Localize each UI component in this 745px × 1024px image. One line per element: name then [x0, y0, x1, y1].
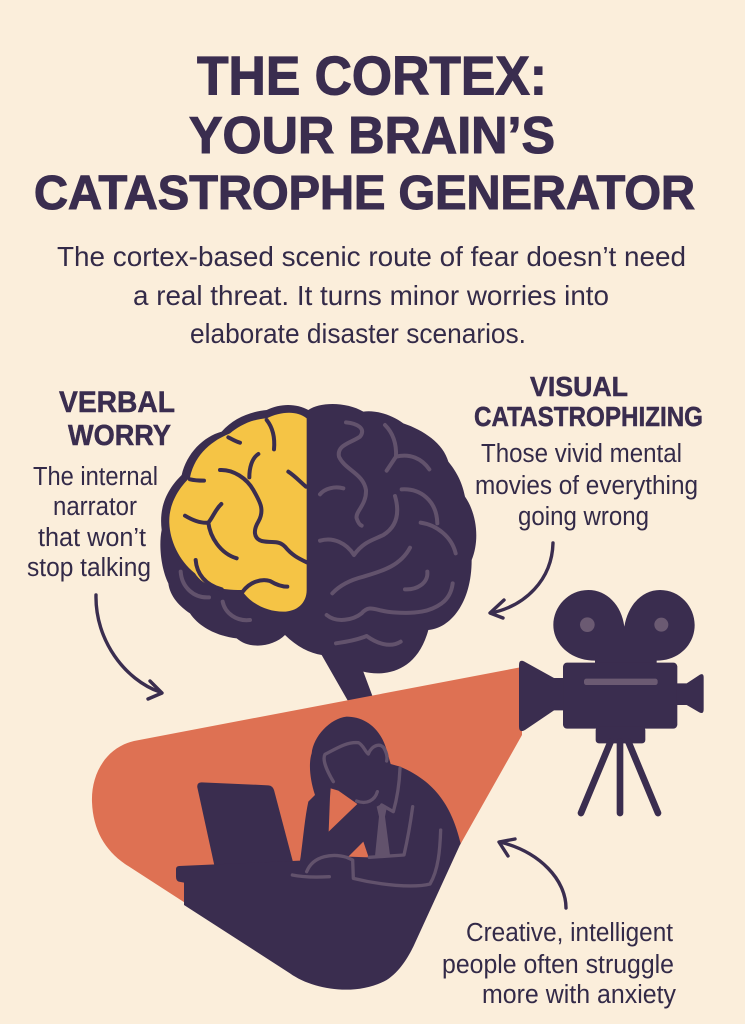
visual catastrophizing callout: movies of everything [475, 472, 698, 500]
movie camera [519, 590, 704, 813]
brain [160, 404, 476, 702]
verbal worry callout [27, 386, 175, 582]
creative people note: Creative, intelligent [466, 919, 673, 947]
verbal worry callout: narrator [53, 493, 137, 521]
person and desk silhouette [176, 717, 461, 990]
front lens [519, 661, 563, 731]
yellow cortex half [169, 413, 307, 612]
verbal worry callout: The internal [33, 463, 158, 491]
visual catastrophizing callout: VISUAL [530, 371, 628, 402]
visual catastrophizing callout [474, 371, 703, 531]
reel hubs [580, 617, 668, 632]
camera slot [584, 679, 658, 685]
verbal worry callout: WORRY [68, 420, 171, 452]
yellow half folds [185, 420, 307, 592]
verbal worry callout: VERBAL [59, 386, 175, 419]
title [34, 44, 695, 220]
visual catastrophizing callout: CATASTROPHIZING [474, 401, 703, 432]
film reels [553, 590, 695, 665]
title: YOUR BRAIN’S [189, 107, 555, 165]
intro text: The cortex-based scenic route of fear doesn’t need [57, 241, 686, 272]
orange gap under chin [329, 788, 357, 832]
title: THE CORTEX: [197, 44, 547, 106]
intro text [57, 241, 686, 349]
intro text: elaborate disaster scenarios. [190, 318, 526, 349]
visual catastrophizing callout: Those vivid mental [481, 440, 682, 468]
arrow to brain from verbal worry [96, 595, 162, 699]
projector beam [92, 667, 522, 906]
clothing and hair lines [292, 743, 441, 886]
arrow to person from creative note [499, 839, 566, 908]
title: CATASTROPHE GENERATOR [34, 167, 695, 220]
camera body [563, 663, 677, 729]
dark half folds [181, 422, 456, 645]
intro text: a real threat. It turns minor worries into [133, 280, 609, 311]
creative people note [442, 919, 676, 1009]
arrow to brain from visual catastrophizing [490, 543, 553, 618]
creative people note: more with anxiety [482, 981, 676, 1009]
verbal worry callout: stop talking [27, 554, 151, 582]
tripod head [596, 727, 645, 743]
orange gap under arm [348, 842, 369, 857]
rear eyepiece [677, 674, 704, 713]
verbal worry callout: that won’t [38, 524, 146, 552]
visual catastrophizing callout: going wrong [518, 503, 649, 531]
laptop [197, 782, 293, 868]
necktie [375, 804, 390, 856]
person at desk [176, 717, 461, 990]
brain silhouette and stem [160, 404, 476, 702]
creative people note: people often struggle [442, 951, 674, 979]
tripod legs [581, 742, 658, 813]
